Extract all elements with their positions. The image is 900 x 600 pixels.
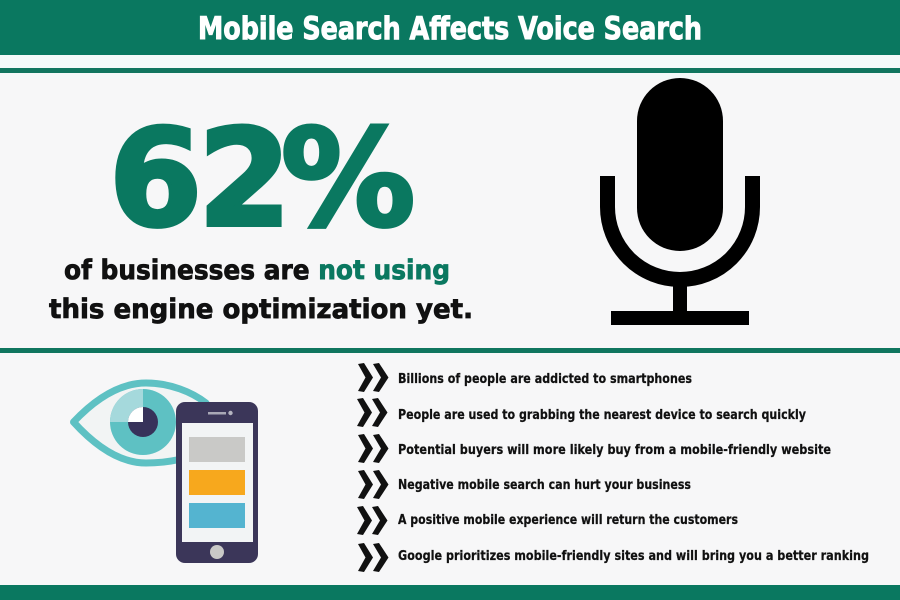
icon: eye xyxy=(74,383,206,463)
list item 1 xyxy=(358,363,692,392)
list item 5: A positive mobile experience will return the customers xyxy=(398,512,738,528)
title: Mobile Search Affects Voice Search xyxy=(198,11,702,47)
icon: smartphone xyxy=(176,402,258,563)
statistic line two: this engine optimization yet. xyxy=(49,294,473,325)
big percentage: 62% xyxy=(109,101,415,257)
statistic line one: of businesses are not using xyxy=(64,255,450,286)
icon: eye and smartphone xyxy=(74,383,258,563)
list item 2: People are used to grabbing the nearest device to search quickly xyxy=(398,407,806,423)
list item 3 xyxy=(358,434,831,463)
icon: microphone xyxy=(608,78,752,325)
list: mobile search points xyxy=(357,363,869,572)
list item 4 xyxy=(358,470,691,499)
list item 5 xyxy=(357,506,738,535)
list item 4: Negative mobile search can hurt your business xyxy=(398,477,691,493)
list item 6 xyxy=(358,543,869,572)
panel: 62 percent statistic xyxy=(49,101,473,325)
header band xyxy=(0,0,900,55)
list item 1: Billions of people are addicted to smartphones xyxy=(398,371,692,387)
list item 2 xyxy=(357,398,806,427)
footer band xyxy=(0,585,900,600)
